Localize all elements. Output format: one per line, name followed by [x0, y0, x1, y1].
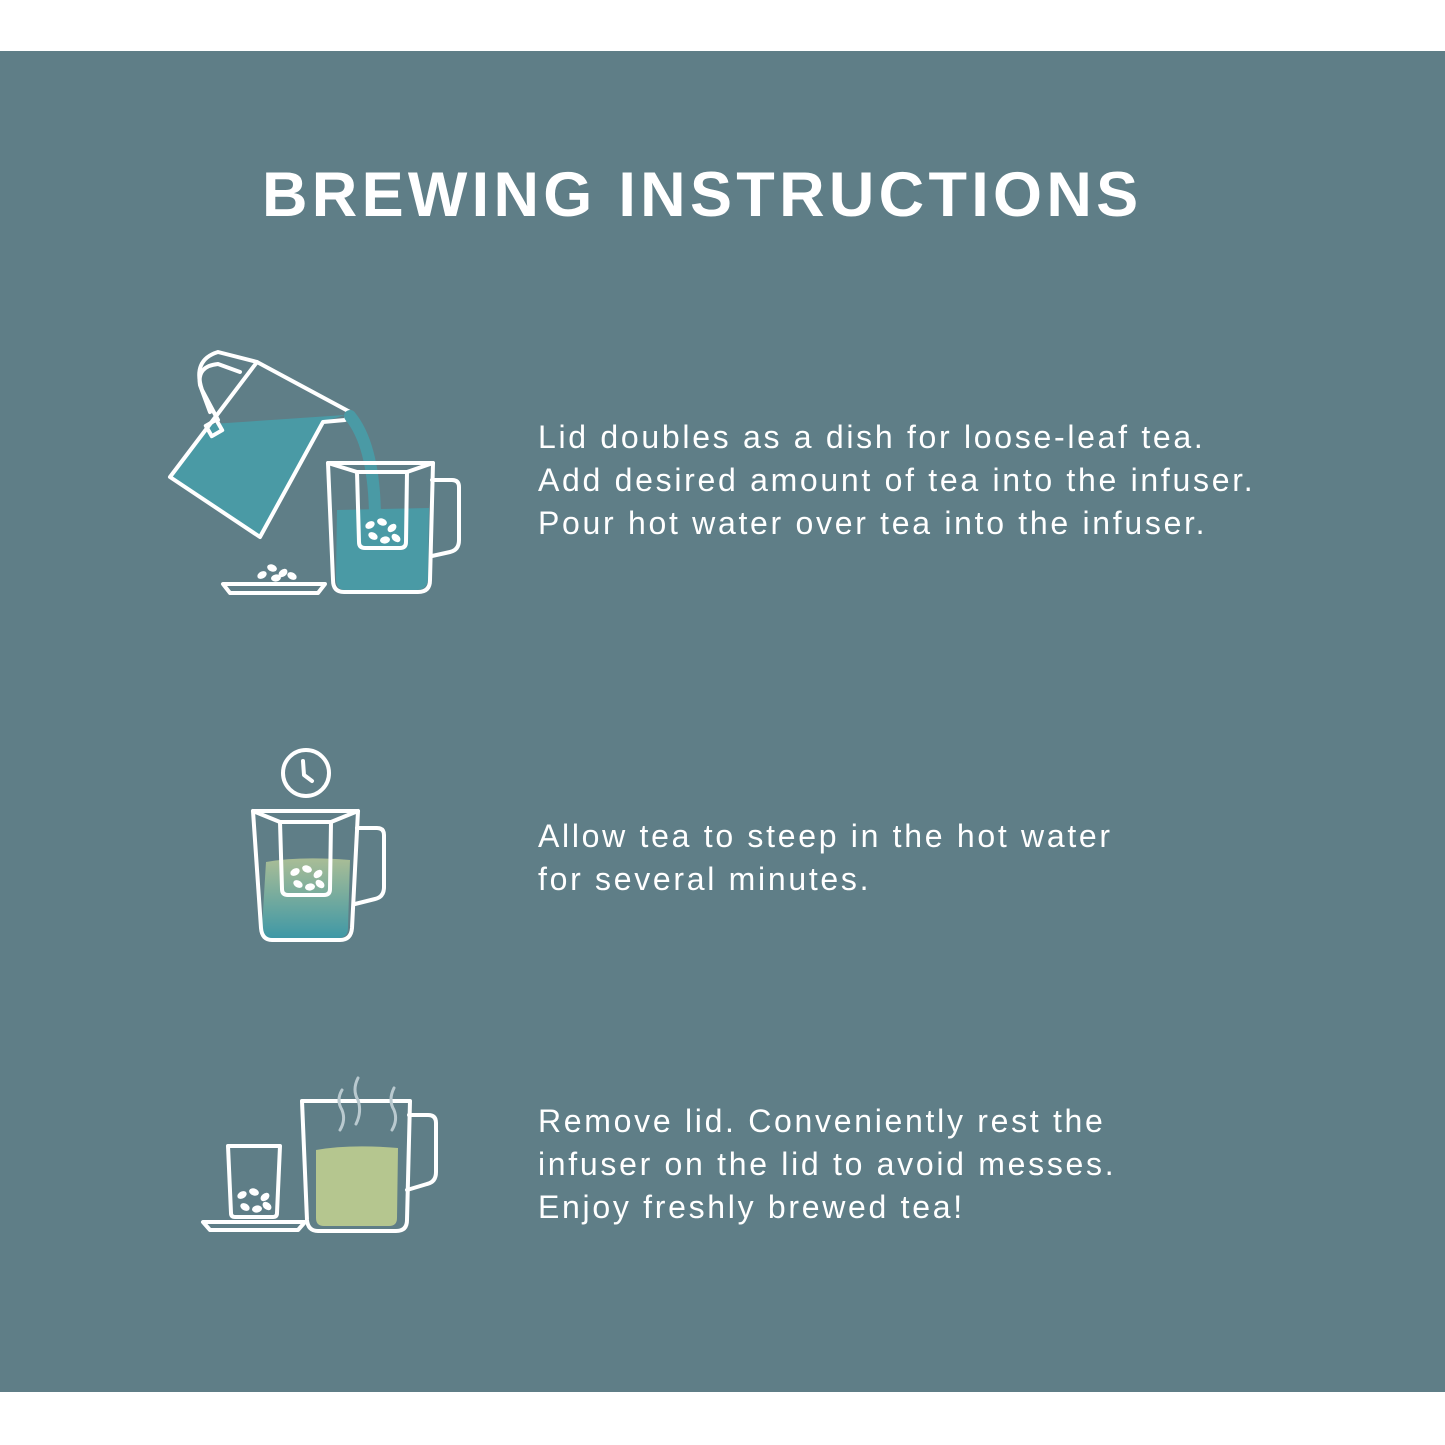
icon: steeping mug with clock [253, 750, 384, 940]
title: BREWING INSTRUCTIONS [262, 160, 1142, 230]
text: step 3: Remove lid. Conveniently rest the [538, 1103, 1106, 1139]
text: step 1 [538, 419, 1255, 541]
text: step 1: Add desired amount of tea into the infuser. [538, 462, 1255, 498]
text: step 2: Allow tea to steep in the hot water [538, 818, 1113, 854]
text: step 3 [538, 1103, 1116, 1225]
text: step 2: for several minutes. [538, 861, 871, 897]
text: step 1: Pour hot water over tea into the infuser. [538, 505, 1207, 541]
text: step 2 [538, 818, 1113, 897]
icon: pouring pitcher into mug [170, 352, 459, 593]
text: step 3: Enjoy freshly brewed tea! [538, 1189, 965, 1225]
icon: brewed tea mug and infuser on lid [203, 1078, 436, 1231]
text: step 1: Lid doubles as a dish for loose-leaf tea. [538, 419, 1206, 455]
text: step 3: infuser on the lid to avoid messes. [538, 1146, 1116, 1182]
